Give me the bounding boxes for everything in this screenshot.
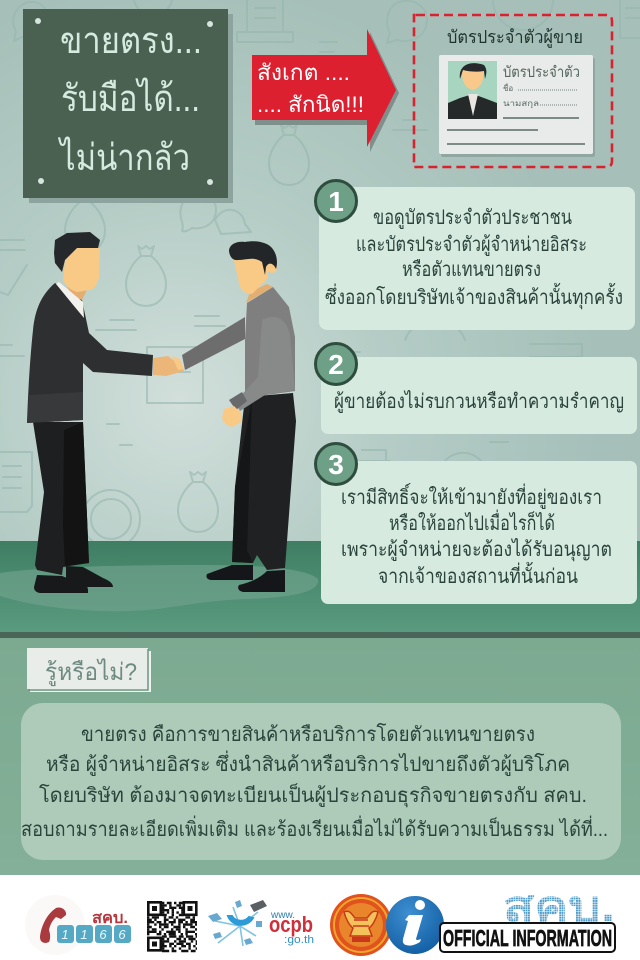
panel: tip 1: และบัตรประจำตัวผู้จำหน่ายอิสระ — [356, 234, 587, 257]
panel: tip 3: หรือให้ออกไปเมื่อไรก็ได้ — [389, 509, 555, 535]
panel: did you know text — [21, 703, 621, 860]
front shoe — [34, 575, 88, 593]
panel: tip 2 — [316, 344, 637, 434]
logo: ocpb website — [208, 900, 314, 946]
title board — [23, 9, 233, 203]
back shoe — [66, 566, 113, 587]
hair — [229, 241, 277, 275]
seller ID card example: บัตรประจำตัวผู้ขาย — [447, 27, 583, 48]
logo: official information: สคบ. — [503, 883, 615, 930]
suit jacket — [27, 283, 153, 423]
seller ID card example: บัตรประจำตัว — [503, 64, 580, 81]
panel: tip 3: เพราะผู้จำหน่ายจะต้องได้รับอนุญาต — [341, 538, 612, 562]
logo: 1166 hotline: 6 — [118, 927, 126, 942]
neck — [246, 284, 273, 303]
panel: tip 3 — [316, 444, 637, 604]
panel: tip 1: ขอดูบัตรประจำตัวประชาชน — [373, 207, 572, 230]
seller ID card example — [414, 15, 612, 167]
heading: did you know: รู้หรือไม่? — [45, 658, 137, 687]
grey shirt body — [245, 287, 295, 398]
number badge 1 — [316, 180, 356, 222]
background wall — [0, 0, 640, 541]
seller ID card example: ชื่อ — [503, 82, 513, 93]
title board: รับมือได้... — [61, 77, 200, 119]
logo: ocpb website: :go.th — [284, 934, 314, 946]
man in grey shirt — [182, 241, 296, 592]
right hand — [222, 406, 242, 427]
face — [63, 248, 100, 292]
red arrow callout: .... สักนิด!!! — [257, 92, 364, 117]
panel: tip 1 — [316, 180, 635, 330]
number badge 1: 1 — [328, 186, 344, 217]
face — [233, 256, 268, 294]
logo: 1166 hotline: 1 — [80, 927, 88, 942]
title board: ขายตรง... — [60, 20, 202, 61]
number badge 3 — [316, 444, 356, 484]
panel: tip 3: จากเจ้าของสถานที่นั้นก่อน — [378, 562, 578, 588]
number badge 2 — [316, 344, 356, 384]
emblem: consumer protection board seal — [330, 894, 392, 956]
footer background — [0, 875, 640, 960]
floor — [0, 541, 640, 632]
seller ID card example: นามสกุล — [503, 99, 539, 108]
panel: tip 1: หรือตัวแทนขายตรง — [402, 259, 541, 281]
panel: did you know text: หรือ ผู้จำหน่ายอิสระ ซึ่งนำสินค้าหรือบริการไปขายถึงตัวผู้บริโภค — [46, 750, 570, 777]
icon: information — [386, 896, 444, 954]
trousers — [232, 393, 296, 570]
number badge 3: 3 — [328, 449, 344, 480]
logo: official information — [440, 883, 615, 952]
clasped hands — [153, 356, 184, 376]
shirt — [56, 282, 84, 318]
back shoe — [206, 565, 253, 580]
logo: 1166 hotline: 6 — [99, 927, 107, 942]
hair — [54, 232, 100, 272]
lower section background — [0, 638, 640, 875]
panel: did you know text: โดยบริษัท ต้องมาจดทะเบียนเป็นผู้ประกอบธุรกิจขายตรงกับ สคบ. — [39, 782, 587, 808]
dark divider band — [0, 632, 640, 638]
logo: ocpb website: ocpb — [269, 912, 313, 937]
background icon pattern — [0, 0, 640, 548]
far arm — [182, 317, 245, 370]
logo: 1166 hotline: สคบ. — [92, 910, 128, 927]
neck — [63, 278, 89, 300]
floor ellipse shadow — [0, 565, 318, 611]
red arrow callout: สังเกต .... — [257, 60, 350, 85]
heading: did you know — [27, 648, 151, 692]
QR code — [147, 902, 197, 951]
title board: ไม่น่ากลัว — [57, 136, 190, 178]
panel: did you know text: ขายตรง คือการขายสินค้าหรือบริการโดยตัวแทนขายตรง — [81, 723, 535, 746]
man in black suit — [27, 232, 184, 593]
logo: 1166 hotline — [25, 895, 131, 955]
logo: ocpb website: www. — [270, 910, 295, 921]
front shoe — [238, 570, 285, 592]
number badge 2: 2 — [328, 349, 344, 380]
trousers — [33, 422, 89, 575]
panel: tip 3: เรามีสิทธิ์จะให้เข้ามายังที่อยู่ของเรา — [341, 482, 602, 510]
near arm — [235, 317, 295, 411]
red arrow callout — [252, 29, 399, 152]
logo: 1166 hotline: 1 — [61, 927, 69, 942]
